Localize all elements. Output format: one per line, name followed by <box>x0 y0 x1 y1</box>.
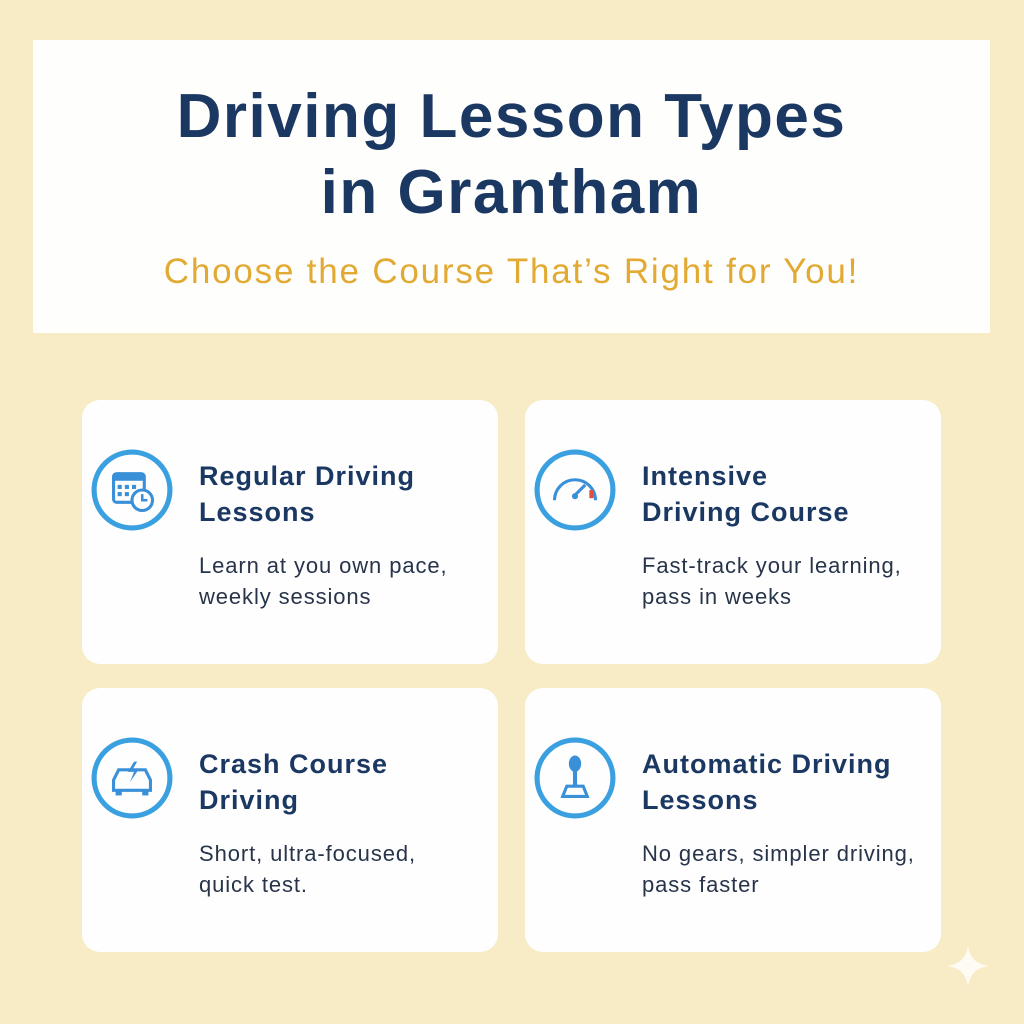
description: quick test. <box>199 872 308 897</box>
heading <box>642 461 850 527</box>
icon: car bolt <box>92 738 172 818</box>
heading: Intensive <box>642 461 768 491</box>
description: No gears, simpler driving, <box>642 841 915 866</box>
description: weekly sessions <box>199 584 371 609</box>
icon: calendar clock <box>92 450 172 530</box>
heading <box>199 749 388 815</box>
header panel <box>33 40 990 333</box>
heading <box>642 749 892 815</box>
heading: Driving <box>199 785 299 815</box>
heading: Lessons <box>642 785 759 815</box>
title <box>177 82 846 227</box>
description <box>642 553 902 609</box>
heading: Automatic Driving <box>642 749 892 779</box>
card: regular <box>82 400 498 664</box>
subtitle: Choose the Course That’s Right for You! <box>164 252 859 291</box>
card: intensive <box>525 400 941 664</box>
heading: Crash Course <box>199 749 388 779</box>
icon: gear stick <box>534 738 616 818</box>
description: Short, ultra-focused, <box>199 841 416 866</box>
card: automatic <box>525 688 941 952</box>
title: Driving Lesson Types <box>177 82 846 151</box>
description: pass faster <box>642 872 760 897</box>
description <box>199 841 416 897</box>
description: Fast-track your learning, <box>642 553 902 578</box>
card: crash <box>82 688 498 952</box>
heading: Lessons <box>199 497 316 527</box>
title: in Grantham <box>321 158 702 227</box>
heading: Driving Course <box>642 497 850 527</box>
heading <box>199 461 415 527</box>
icon: speedometer <box>534 450 616 530</box>
description: pass in weeks <box>642 584 792 609</box>
heading: Regular Driving <box>199 461 415 491</box>
icon: sparkle <box>948 946 988 986</box>
description: Learn at you own pace, <box>199 553 448 578</box>
description <box>642 841 915 897</box>
description <box>199 553 448 609</box>
